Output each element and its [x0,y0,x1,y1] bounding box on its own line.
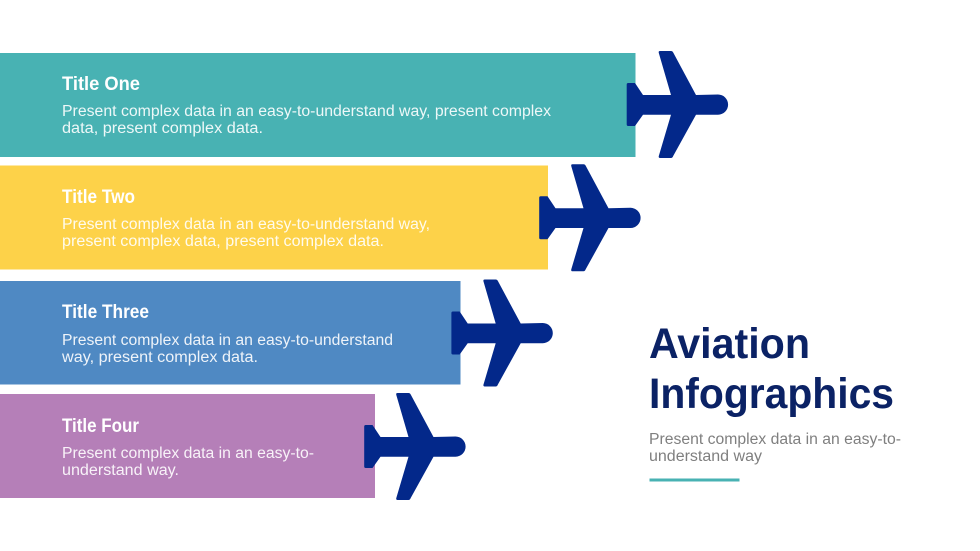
panel: title three [0,281,460,384]
panel: title one [0,53,636,157]
heading: title one: Title One [62,74,140,95]
title: Aviation [649,320,810,368]
subtitle: Present complex data in an easy-to- [649,431,901,448]
text block: title one body: Present complex data in an easy-to-understand way, present complex [62,103,551,120]
text block: title three body: Present complex data in an easy-to-understand [62,332,393,349]
icon: airplane three [451,280,553,386]
heading: title four: Title Four [62,416,140,437]
text block: title three body: way, present complex data. [61,349,258,366]
title: Infographics [649,370,894,418]
heading: title two: Title Two [62,187,135,208]
text block: title four body: Present complex data in an easy-to- [62,445,314,462]
text block: title one body: data, present complex data. [62,120,263,137]
accent line [650,478,740,482]
panel: title two [0,166,548,270]
icon: airplane two [539,164,641,271]
text block: title two body: Present complex data in an easy-to-understand way, [62,216,430,233]
icon: airplane one [627,51,728,158]
text block: title two body: present complex data, present complex data. [62,233,384,250]
icon: airplane four [364,393,466,500]
heading: title three: Title Three [62,302,149,323]
text block: title four body: understand way. [62,462,179,479]
subtitle: understand way [649,448,762,465]
panel: title four [0,394,375,498]
